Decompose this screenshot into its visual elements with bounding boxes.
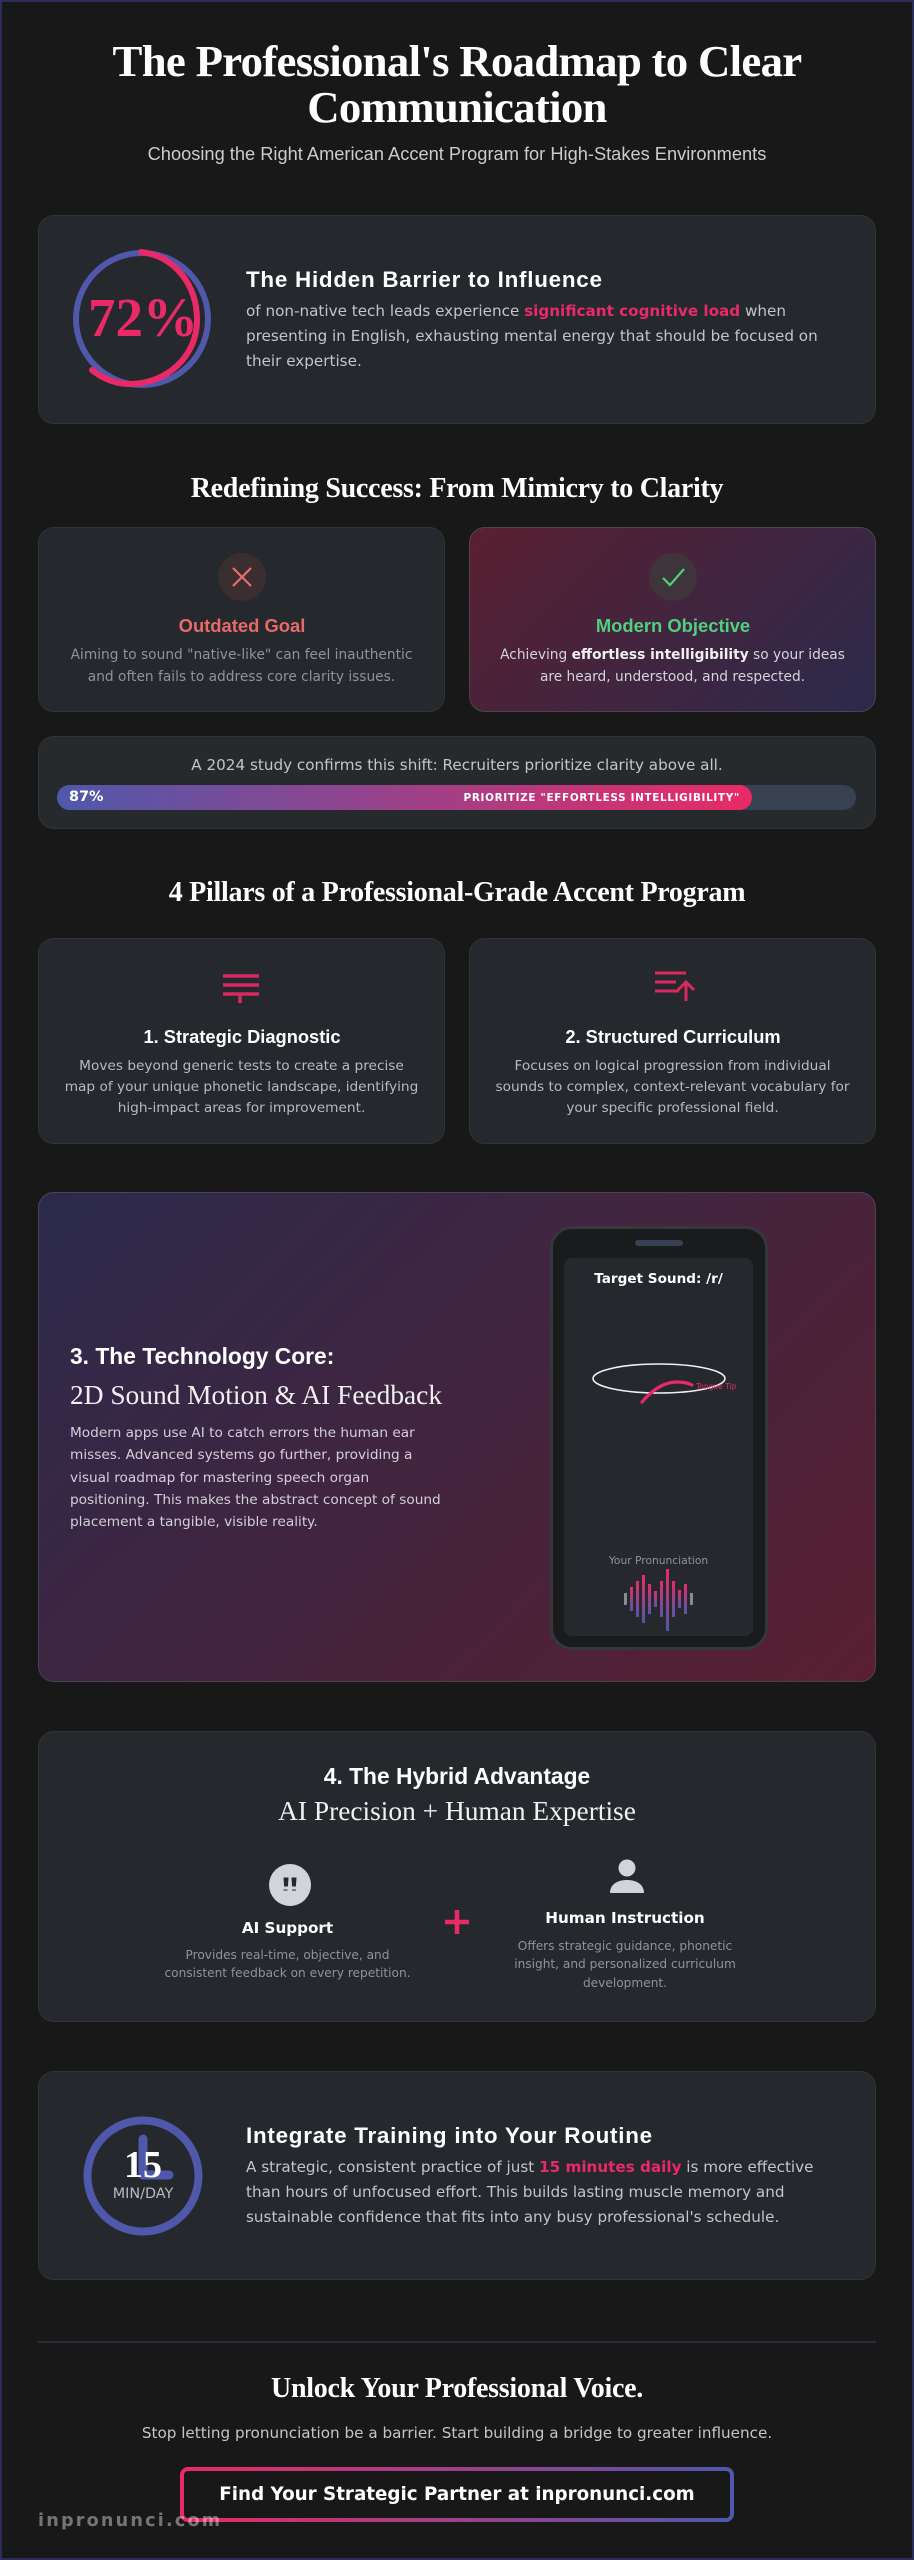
phone notch xyxy=(635,1240,683,1246)
diagram: tongue position: Tongue Tip xyxy=(695,1382,737,1391)
phone mockup xyxy=(550,1226,768,1650)
text: technology body: placement a tangible, visible reality. xyxy=(70,1514,318,1530)
panel: hybrid advantage xyxy=(38,1731,876,2022)
panel: outdated goal xyxy=(38,527,445,712)
heading: human instruction: Human Instruction xyxy=(545,1909,705,1927)
text: technology body xyxy=(70,1425,441,1530)
text: routine body xyxy=(246,2158,813,2226)
text: study statement: A 2024 study confirms this shift: Recruiters prioritize clarity above all. xyxy=(191,756,723,774)
text: modern objective body: are heard, understood, and respected. xyxy=(540,668,805,684)
text: hidden barrier body: their expertise. xyxy=(246,352,362,370)
text: hidden barrier body: of non-native tech leads experience significant cognitive load when xyxy=(246,302,786,320)
button: CTA xyxy=(180,2467,734,2522)
chart: 72% ring xyxy=(73,249,211,388)
text: strategic diagnostic body: high-impact areas for improvement. xyxy=(118,1100,365,1116)
text: routine body: A strategic, consistent practice of just 15 minutes daily is more effective xyxy=(246,2158,813,2176)
panel: technology core xyxy=(38,1192,876,1682)
title: Communication xyxy=(307,82,607,132)
panel: structured curriculum xyxy=(469,938,876,1144)
panel: hidden barrier stat xyxy=(38,215,876,424)
text: outdated goal body xyxy=(70,647,412,684)
label: 87%: 87% xyxy=(69,789,103,805)
text: hidden barrier body: presenting in English, exhausting mental energy that should be focused on xyxy=(246,327,818,345)
chart: 15 minute clock: 15 xyxy=(124,2144,162,2186)
text: call to action: Stop letting pronunciation be a barrier. Start building a bridge to greater influence. xyxy=(142,2424,772,2442)
button label: Find Your Strategic Partner at inpronunci.com xyxy=(219,2484,695,2504)
text: human instruction body: Offers strategic guidance, phonetic xyxy=(518,1939,732,1953)
subheading: precision plus expertise: AI Precision + Human Expertise xyxy=(278,1796,636,1826)
text: structured curriculum body: sounds to complex, context-relevant vocabulary for xyxy=(495,1079,850,1095)
text: routine body: than hours of unfocused effort. This builds lasting muscle memory and xyxy=(246,2183,784,2201)
text: human instruction body xyxy=(514,1939,736,1990)
text: technology body: misses. Advanced systems go further, providing a xyxy=(70,1447,412,1463)
bar fill xyxy=(57,785,752,810)
watermark: inpronunci.com xyxy=(38,2511,222,2531)
heading: AI support: AI Support xyxy=(242,1919,333,1937)
heading: structured curriculum: 2. Structured Curriculum xyxy=(565,1026,781,1047)
heading: hybrid advantage: 4. The Hybrid Advantage xyxy=(324,1763,590,1789)
divider xyxy=(38,2341,876,2343)
icon: AI face xyxy=(269,1864,311,1906)
text: structured curriculum body: your specific professional field. xyxy=(566,1100,779,1116)
heading: integrate training: Integrate Training into Your Routine xyxy=(246,2123,653,2148)
text: strategic diagnostic body: Moves beyond generic tests to create a precise xyxy=(79,1058,404,1074)
heading: strategic diagnostic: 1. Strategic Diagnostic xyxy=(143,1026,341,1047)
icon: cross xyxy=(218,553,266,601)
text: structured curriculum body: Focuses on logical progression from individual xyxy=(514,1058,831,1074)
subheading: sound motion: 2D Sound Motion & AI Feedback xyxy=(70,1380,442,1410)
label: your pronunciation: Your Pronunciation xyxy=(609,1554,708,1567)
chart: 15 minute clock xyxy=(84,2116,202,2236)
text: AI support body: Provides real-time, objective, and xyxy=(186,1948,389,1962)
heading: unlock your voice: Unlock Your Professional Voice. xyxy=(271,2372,643,2404)
subtitle: Choosing the Right American Accent Program for High-Stakes Environments xyxy=(148,143,766,164)
heading: modern objective: Modern Objective xyxy=(596,615,750,636)
panel: modern objective xyxy=(469,527,876,712)
text: modern objective body: Achieving effortless intelligibility so your ideas xyxy=(500,647,845,663)
text: human instruction body: insight, and personalized curriculum xyxy=(514,1957,736,1971)
icon: ascending list xyxy=(655,972,695,1001)
title: The Professional's Roadmap to Clear xyxy=(113,36,801,86)
heading: redefining success: Redefining Success: From Mimicry to Clarity xyxy=(191,473,723,504)
heading: 4 pillars: 4 Pillars of a Professional-Grade Accent Program xyxy=(169,877,745,908)
text: hidden barrier body xyxy=(246,302,818,370)
text: strategic diagnostic body: map of your unique phonetic landscape, identifying xyxy=(65,1079,418,1095)
diagram: tongue position xyxy=(592,1363,737,1404)
text: outdated goal body: and often fails to address core clarity issues. xyxy=(88,668,395,684)
text: structured curriculum body xyxy=(495,1058,850,1116)
text: routine body: sustainable confidence that fits into any busy professional's schedule. xyxy=(246,2208,779,2226)
panel: recruiter study xyxy=(38,736,876,829)
phone screen xyxy=(564,1258,753,1636)
text: technology body: visual roadmap for mastering speech organ xyxy=(70,1470,369,1486)
text: outdated goal body: Aiming to sound "native-like" can feel inauthentic xyxy=(71,647,412,663)
text: AI support body: consistent feedback on every repetition. xyxy=(164,1966,411,1980)
heading: hidden barrier: The Hidden Barrier to Influence xyxy=(246,267,603,292)
text: strategic diagnostic body xyxy=(65,1058,418,1116)
icon: person xyxy=(610,1860,644,1893)
chart: 15 minute clock: MIN/DAY xyxy=(113,2186,174,2202)
panel: daily routine xyxy=(38,2071,876,2280)
heading: outdated goal: Outdated Goal xyxy=(179,615,305,636)
chart: waveform xyxy=(624,1569,693,1631)
text: technology body: positioning. This makes the abstract concept of sound xyxy=(70,1492,441,1508)
icon: plus xyxy=(445,1910,469,1934)
label: prioritize: PRIORITIZE "EFFORTLESS INTELLIGIBILITY" xyxy=(464,792,740,804)
icon: diagnostic lines xyxy=(223,974,259,1003)
heading: technology core: 3. The Technology Core: xyxy=(70,1342,334,1368)
chart: 72% ring: 72% xyxy=(88,287,198,348)
title xyxy=(113,36,802,132)
text: modern objective body xyxy=(500,647,845,684)
chart: 87% progress bar xyxy=(57,785,856,810)
panel: strategic diagnostic xyxy=(38,938,445,1144)
icon: check xyxy=(649,553,697,601)
text: target sound: Target Sound: /r/ xyxy=(594,1271,723,1287)
text: technology body: Modern apps use AI to catch errors the human ear xyxy=(70,1425,415,1441)
text: human instruction body: development. xyxy=(583,1976,667,1990)
text: AI support body xyxy=(164,1948,411,1980)
